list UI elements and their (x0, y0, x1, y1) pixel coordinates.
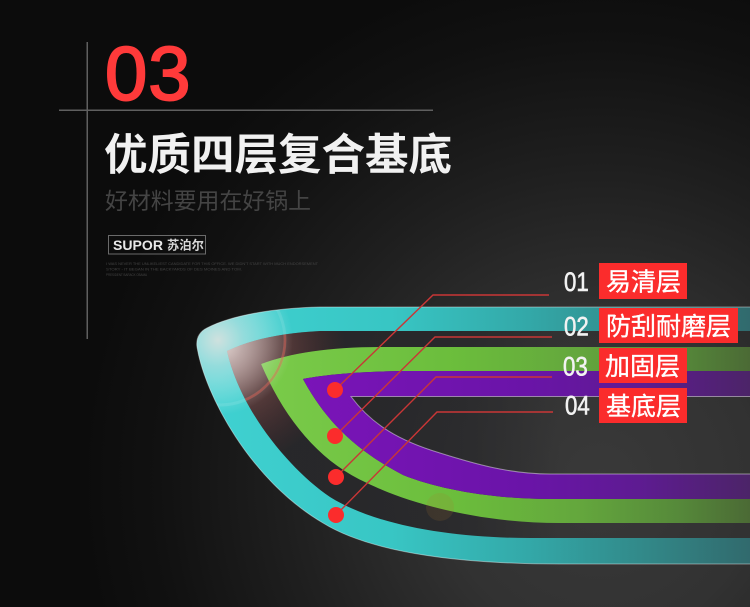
label 02: 防刮耐磨层 (606, 313, 731, 341)
label 03 (563, 348, 687, 383)
label 01: 易清层 (606, 268, 681, 296)
pan cross-section (196, 306, 750, 564)
small print (106, 261, 319, 277)
small print: PRESIDENT BARACK OBAMA (106, 272, 147, 277)
label 03: 加固层 (605, 353, 680, 381)
layer: green hardened layer (261, 347, 750, 523)
pointer 1 (327, 295, 549, 398)
brand logo: SUPOR (113, 237, 163, 253)
label 04: 基底层 (606, 393, 681, 421)
brand logo (108, 236, 206, 254)
layer: teal easy-clean coating (197, 307, 750, 564)
brand logo: 苏泊尔 (167, 238, 204, 252)
small flare spot (426, 493, 454, 521)
lens flare red ring (245, 334, 286, 401)
label 02 (564, 308, 738, 343)
pan interior shade (227, 331, 750, 538)
pointer 2 (327, 337, 552, 444)
label 01: 01 (564, 268, 589, 297)
small print: STORY - IT BEGAN IN THE BACKYARDS OF DES MOINES AND TOM. (106, 266, 242, 272)
title: 优质四层复合基底 (104, 132, 452, 180)
label 03: 03 (563, 353, 588, 382)
subtitle: 好材料要用在好锅上 (105, 188, 311, 214)
label 01 (564, 263, 687, 299)
small print: I WAS NEVER THE UNLIKELIEST CANDIDATE FOR THIS OFFICE. WE DIDN'T START WITH MUCH ENDORSEMENT (106, 261, 319, 266)
pointer 4 (328, 412, 553, 523)
red flare in dark layer (227, 331, 750, 538)
pointer 3 (328, 377, 552, 485)
horizontal rule (59, 110, 433, 111)
vertical rule (86, 42, 88, 339)
pan inner edge highlight (351, 396, 750, 474)
label 02: 02 (564, 313, 589, 342)
label 04: 04 (565, 392, 590, 421)
label 04 (565, 388, 687, 423)
lens flare glow (196, 310, 289, 410)
section number 03: 03 (105, 32, 192, 117)
pan outer edge highlight (197, 307, 750, 564)
layer: purple base layer (303, 371, 750, 499)
